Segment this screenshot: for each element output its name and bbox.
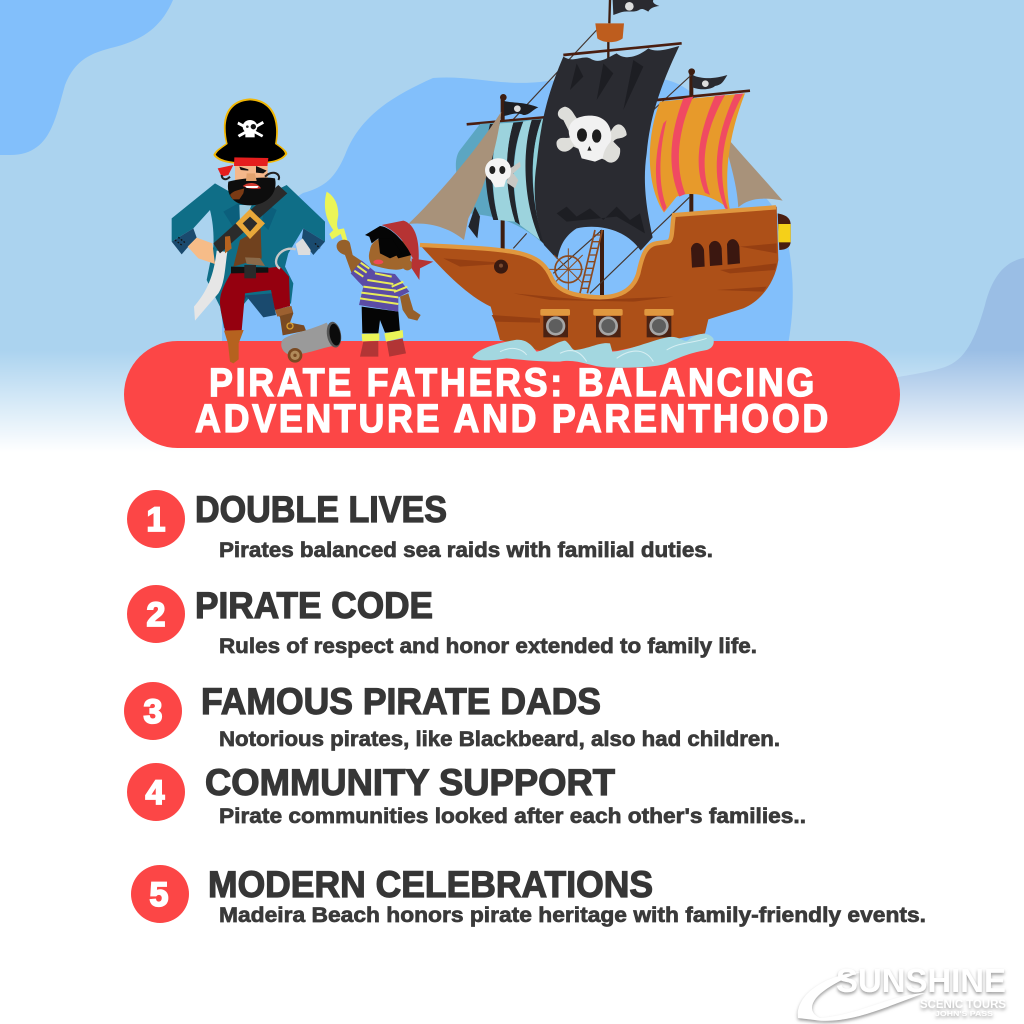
orange striped sail <box>650 93 745 213</box>
hat skull <box>237 120 264 137</box>
item 1: double lives <box>127 489 713 562</box>
number badge 3: 3 <box>144 693 162 731</box>
boots <box>224 306 306 363</box>
hand <box>188 238 215 264</box>
hull porthole <box>494 260 508 274</box>
lantern <box>778 213 791 250</box>
sword <box>194 251 227 321</box>
description 5: Madeira Beach honors pirate heritage with family-friendly events. <box>219 903 926 927</box>
left tan sail <box>408 112 501 240</box>
waves <box>472 334 714 368</box>
logo: sunshine scenic tours <box>798 962 1006 1021</box>
item 5: modern celebrations <box>131 864 926 927</box>
crow's nest <box>595 23 624 42</box>
title banner <box>124 341 900 448</box>
boy pirate <box>325 192 433 357</box>
number badge 1: 1 <box>147 501 165 539</box>
description 4: Pirate communities looked after each other's families.. <box>219 804 806 828</box>
item 3: famous pirate dads <box>124 681 780 751</box>
shirt and vest <box>239 205 252 223</box>
heading 3: FAMOUS PIRATE DADS <box>201 681 601 722</box>
black main sail <box>535 46 679 259</box>
right flag <box>688 68 727 89</box>
logo: sunshine scenic tours: SUNSHINE <box>836 962 1006 999</box>
boy head <box>365 221 433 280</box>
description 3: Notorious pirates, like Blackbeard, also had children. <box>219 727 780 751</box>
top flag <box>613 0 659 15</box>
boy socks and shoes <box>360 330 406 357</box>
title text: ADVENTURE AND PARENTHOOD <box>195 397 831 441</box>
heading 4: COMMUNITY SUPPORT <box>205 762 615 803</box>
number badge 3 <box>124 682 182 740</box>
hat <box>213 98 287 166</box>
number badge 2: 2 <box>147 596 165 634</box>
boy right arm <box>400 293 421 321</box>
boy shirt <box>351 261 409 312</box>
icon: pirate coat <box>172 183 325 328</box>
description 2: Rules of respect and honor extended to family life. <box>219 634 757 658</box>
number badge 5 <box>131 865 189 923</box>
heading 1: DOUBLE LIVES <box>195 489 447 530</box>
heading 2: PIRATE CODE <box>195 585 433 626</box>
right tan sail <box>723 133 783 207</box>
logo: sunshine scenic tours: JOHN'S PASS <box>935 1011 993 1018</box>
number badge 4 <box>127 763 185 821</box>
ship wheel and ladder <box>548 230 602 293</box>
bandolier <box>213 185 287 253</box>
hull <box>420 207 778 351</box>
cannon <box>281 321 343 363</box>
large sail skull <box>556 107 627 163</box>
item 4: community support <box>127 762 806 828</box>
rigging and masts <box>467 0 750 295</box>
trousers and belt <box>220 257 290 331</box>
title text: PIRATE FATHERS: BALANCING <box>209 361 817 405</box>
hook <box>276 238 311 269</box>
logo: sunshine scenic tours: SCENIC TOURS <box>920 997 1006 1011</box>
description 1: Pirates balanced sea raids with familial duties. <box>219 538 713 562</box>
number badge 4: 4 <box>146 774 165 812</box>
item 2: pirate code <box>127 585 757 658</box>
heading 5: MODERN CELEBRATIONS <box>208 864 653 905</box>
boy trousers <box>362 307 400 333</box>
title text <box>195 361 831 441</box>
cannon ports <box>540 309 674 337</box>
number badge 2 <box>127 585 185 643</box>
icon: yellow sword <box>325 192 349 247</box>
face and beard <box>218 163 279 205</box>
pirate father <box>172 98 325 363</box>
small sail skull <box>485 158 521 188</box>
boy left arm <box>337 240 363 273</box>
blue striped sail <box>456 117 557 245</box>
number badge 5: 5 <box>150 876 168 914</box>
left flag <box>500 94 538 116</box>
pirate ship <box>408 0 791 368</box>
stern windows <box>691 239 740 268</box>
number badge 1 <box>127 490 185 548</box>
